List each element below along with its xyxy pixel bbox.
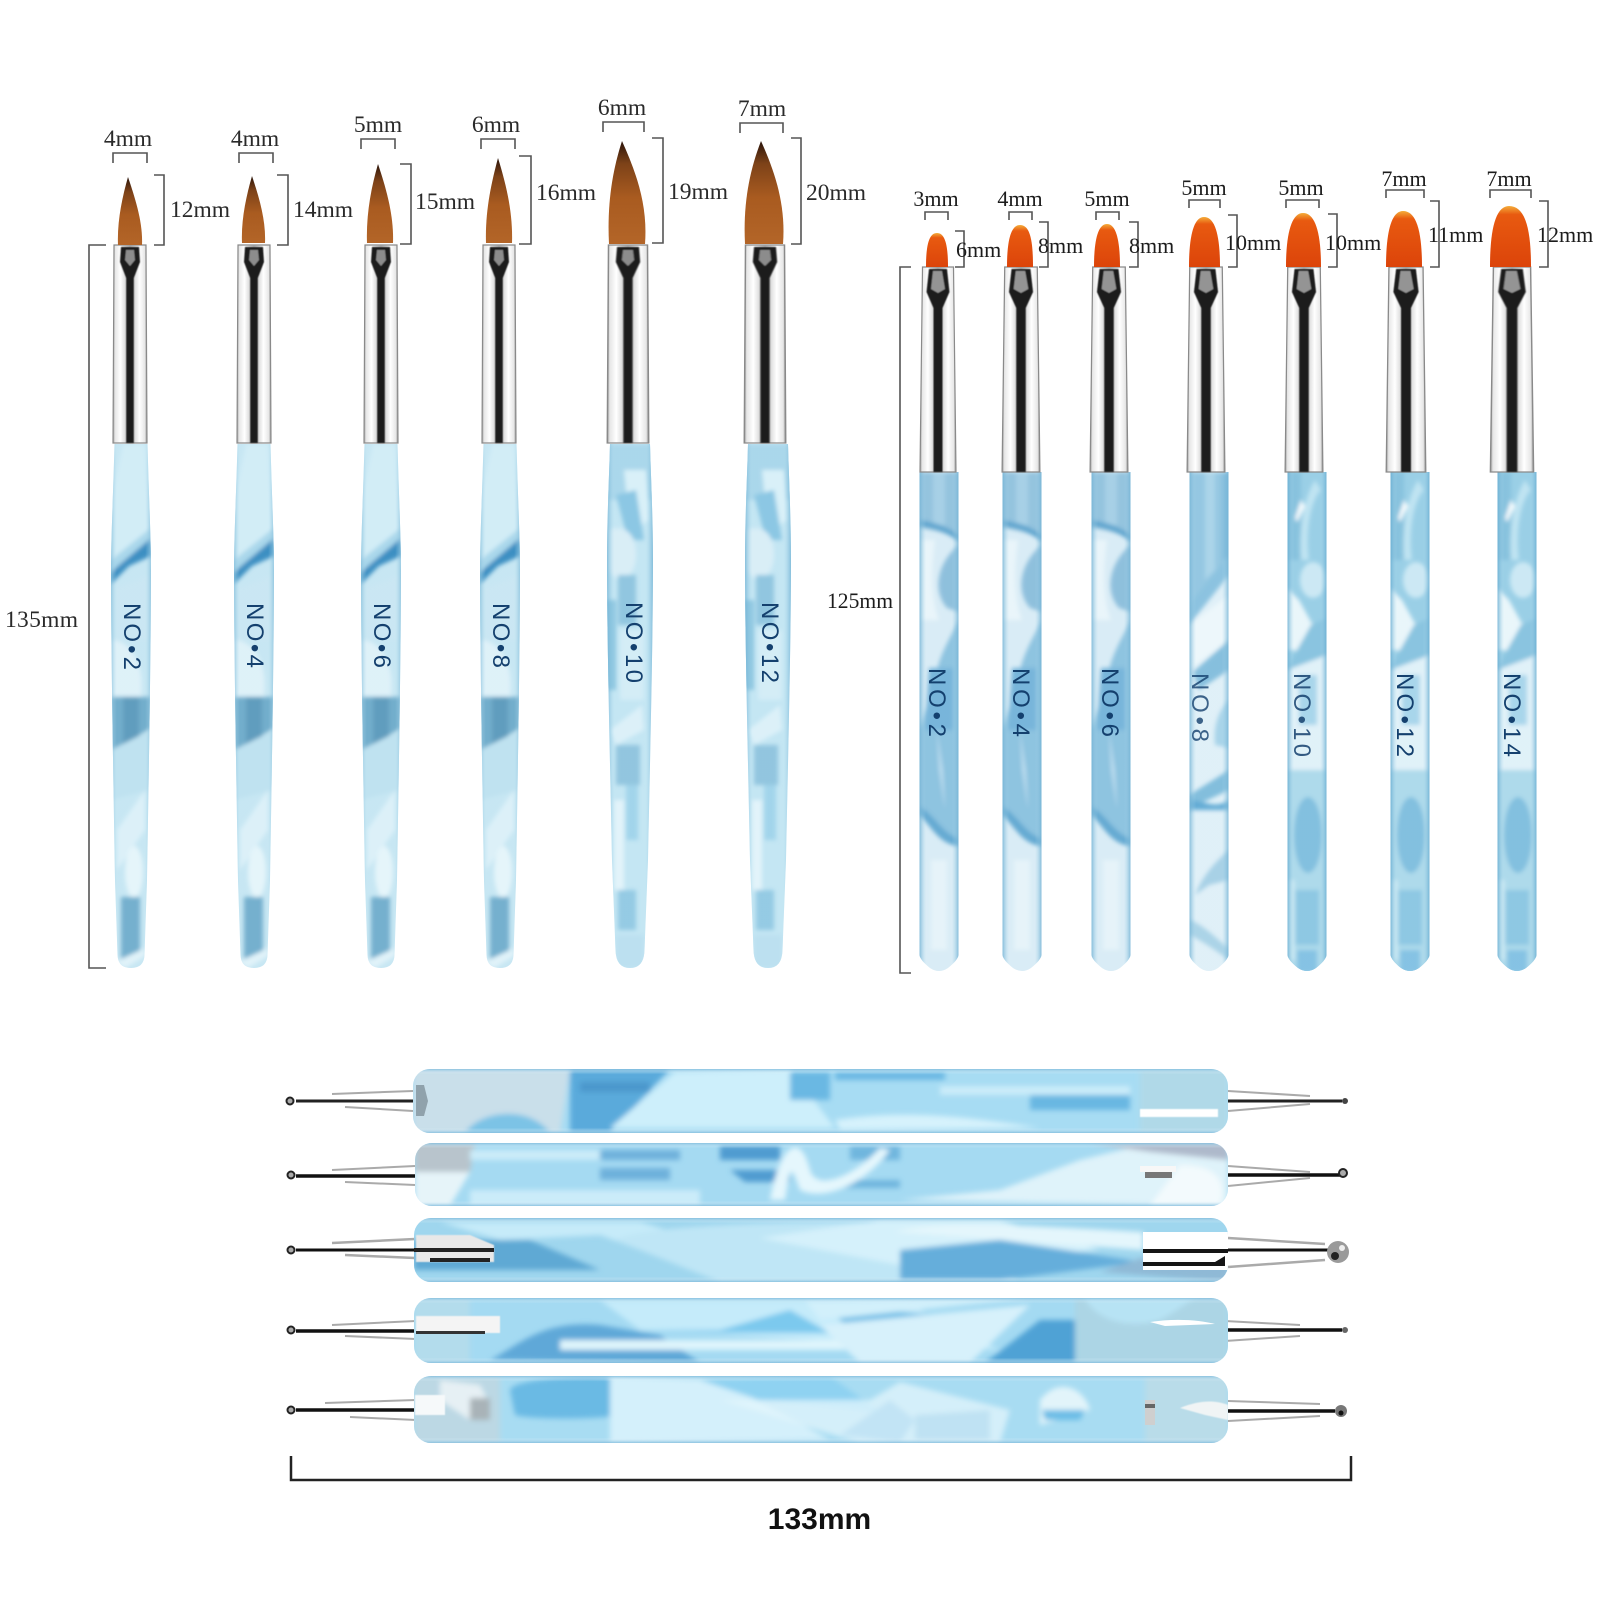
dimension labels: flat brushes: 8mm: [1129, 233, 1174, 258]
dotting tool 2: [288, 1143, 1347, 1206]
brush NO.8: [478, 158, 522, 968]
dotting tool 5: [288, 1376, 1347, 1443]
brush NO.12: [1386, 211, 1430, 974]
dimension labels: pointed brushes: 4mm: [104, 126, 152, 152]
dimension labels: pointed brushes: 20mm: [806, 180, 866, 206]
dimension labels: flat brushes: 5mm: [1181, 175, 1227, 200]
dimension labels: flat brushes: 3mm: [913, 186, 959, 211]
brush NO.6: NO•6: [368, 603, 395, 668]
brush NO.6: [359, 164, 403, 968]
dimension labels: flat brushes: 5mm: [1084, 186, 1130, 211]
brush NO.12: [744, 141, 792, 968]
brush NO.14: NO•14: [1498, 673, 1525, 757]
dimension labels: pointed brushes: 6mm: [598, 95, 646, 121]
brush NO.4: NO•4: [1007, 668, 1034, 737]
dimension labels: pointed brushes: 19mm: [668, 179, 728, 205]
dimension labels: flat brushes: 10mm: [1325, 230, 1381, 255]
panel: pointed brush set: [5, 95, 866, 968]
brush NO.4: [232, 176, 276, 968]
brush NO.2: NO•2: [923, 668, 950, 737]
dimension labels: pointed brushes: 12mm: [170, 197, 230, 223]
dimension labels: flat brushes: 7mm: [1486, 166, 1532, 191]
dimension labels: flat brushes: 4mm: [997, 186, 1043, 211]
dimension labels: pointed brushes: 7mm: [738, 96, 786, 122]
brush NO.12: NO•12: [1391, 673, 1418, 757]
brush NO.6: [1090, 224, 1131, 974]
brush NO.4: NO•4: [241, 603, 268, 668]
dotting tool 4: [288, 1298, 1348, 1363]
brush NO.10: [606, 141, 654, 968]
dimension labels: pointed brushes: 14mm: [293, 197, 353, 223]
dimension labels: flat brushes: [827, 166, 1593, 973]
dotting tool 1: [286, 1069, 1348, 1133]
brush NO.2: [919, 233, 959, 974]
brush NO.8: NO•8: [487, 603, 514, 668]
dotting tool 3: [288, 1218, 1349, 1282]
brush NO.10: NO•10: [620, 602, 647, 683]
panel: dotting tools: [286, 1069, 1351, 1536]
dimension labels: pointed brushes: 4mm: [231, 126, 279, 152]
dimension labels: pointed brushes: 6mm: [472, 112, 520, 138]
dimension labels: flat brushes: 8mm: [1038, 233, 1083, 258]
brush NO.8: NO•8: [1186, 673, 1213, 742]
dimension labels: pointed brushes: 15mm: [415, 189, 475, 215]
brush NO.2: [109, 177, 153, 968]
brush NO.14: [1490, 206, 1537, 974]
dimension labels: flat brushes: 10mm: [1225, 230, 1281, 255]
length label 133mm: 133mm: [768, 1503, 871, 1536]
dimension labels: flat brushes: 7mm: [1381, 166, 1427, 191]
dimension labels: pointed brushes: 5mm: [354, 112, 402, 138]
brush NO.6: NO•6: [1096, 668, 1123, 737]
dimension labels: pointed brushes: [5, 95, 866, 968]
dimension labels: flat brushes: 6mm: [956, 237, 1001, 262]
brush NO.2: NO•2: [118, 603, 145, 670]
brush NO.12: NO•12: [756, 602, 783, 683]
panel: flat gel brush set: [827, 166, 1593, 974]
dimension labels: pointed brushes: 16mm: [536, 180, 596, 206]
dimension bracket: dotting tools: [291, 1456, 1351, 1480]
brush NO.8: [1186, 217, 1229, 974]
dimension labels: flat brushes: 125mm: [827, 588, 893, 613]
brush NO.4: [1002, 225, 1042, 974]
dimension labels: pointed brushes: 135mm: [5, 607, 78, 633]
dimension labels: flat brushes: 12mm: [1537, 222, 1593, 247]
brush NO.10: NO•10: [1288, 673, 1315, 757]
dimension labels: flat brushes: 5mm: [1278, 175, 1324, 200]
dimension labels: flat brushes: 11mm: [1428, 222, 1483, 247]
brush NO.10: [1285, 213, 1327, 974]
